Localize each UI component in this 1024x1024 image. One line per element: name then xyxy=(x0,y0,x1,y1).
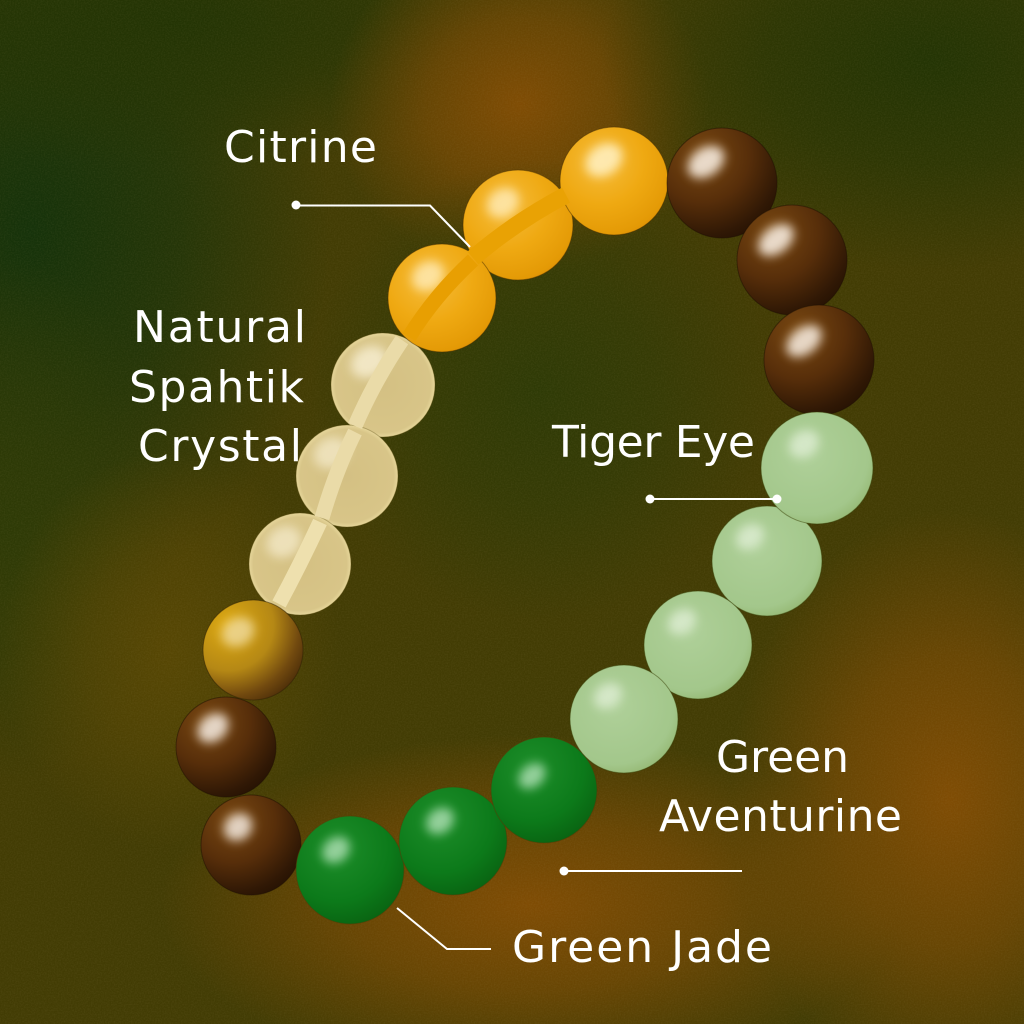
beads: green aventurine xyxy=(570,412,873,773)
beads: natural spahtik crystal xyxy=(249,333,435,615)
label: Natural Spahtik Crystal: Crystal xyxy=(138,421,302,472)
leader line: Citrine xyxy=(292,200,470,247)
label: Citrine: Citrine xyxy=(224,122,377,173)
leader line: Tiger Eye xyxy=(646,494,782,504)
label: Natural Spahtik Crystal xyxy=(129,302,306,472)
beads: green jade xyxy=(296,737,597,924)
leader line: Green Aventurine xyxy=(560,866,742,876)
label: Tiger Eye: Tiger Eye xyxy=(551,417,755,468)
label: Natural Spahtik Crystal: Natural xyxy=(133,302,306,353)
label: Natural Spahtik Crystal: Spahtik xyxy=(129,362,305,413)
label: Green Aventurine: Green xyxy=(716,732,849,783)
label: Green Aventurine: Aventurine xyxy=(659,791,902,842)
label: Green Aventurine xyxy=(659,732,902,842)
beads: tiger eye and brown xyxy=(176,128,874,895)
leader line: Green Jade xyxy=(397,908,491,949)
label: Green Jade: Green Jade xyxy=(512,922,772,973)
bracelet xyxy=(176,127,874,924)
beads: citrine xyxy=(388,127,668,352)
